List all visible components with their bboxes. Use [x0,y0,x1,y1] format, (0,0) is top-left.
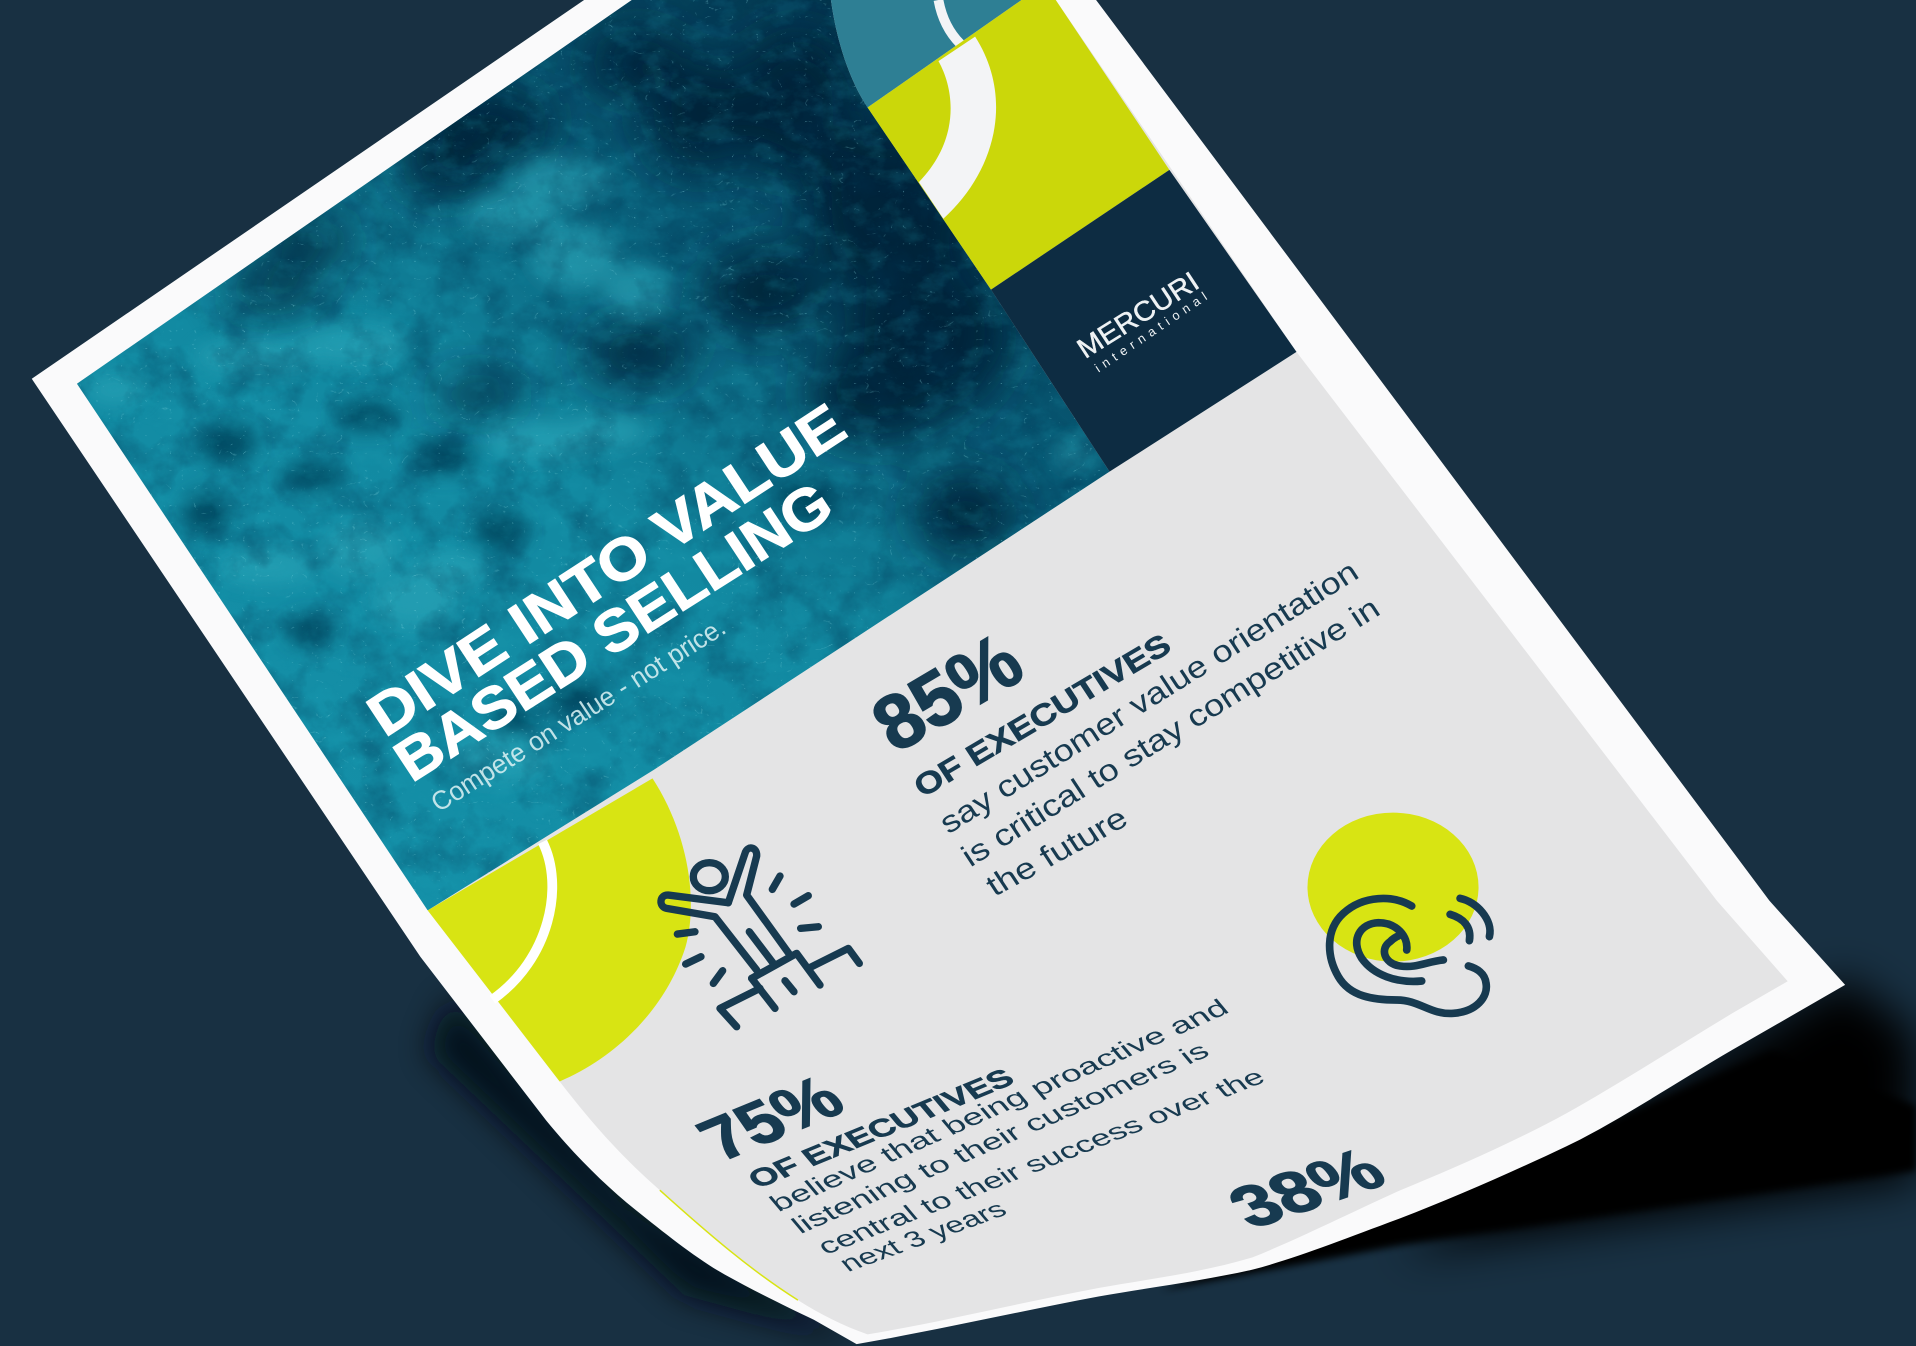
shadow under lower-left edge [428,996,855,1342]
logo: Mercuri International: MERCURI [1071,266,1204,364]
stat: 75% of executives: believe that being proactive and [764,995,1235,1217]
icon: person celebrating on podium [661,848,859,1027]
stat: 75% of executives: OF EXECUTIVES [742,1063,1020,1194]
panel: lime block with white arc [868,0,1169,290]
stat: 75% of executives [684,995,1271,1277]
stat: 75% of executives: next 3 years [834,1197,1013,1277]
shadow under curled corner [1161,978,1916,1290]
lower lime circle segment [428,778,691,1081]
title: DIVE INTO VALUE [356,392,857,749]
stat: 38%: 38% [1214,1136,1399,1240]
panel: navy logo block [991,170,1296,472]
panel: teal quarter circle [831,0,1022,108]
stat: 75% of executives: central to their success over the [812,1064,1271,1260]
stat: 85% of executives: say customer value orientation [933,554,1364,840]
stat: 85% of executives: OF EXECUTIVES [908,628,1177,804]
stat: 85% of executives: is critical to stay competitive in [955,591,1386,873]
stat: 85% of executives: the future [980,801,1134,903]
stat: 75% of executives: listening to their customers is [786,1038,1215,1239]
stat: 85% of executives: 85% [857,616,1038,768]
stat: 85% of executives [857,554,1386,903]
icon: ear [1330,898,1490,1013]
subtitle: Compete on value - not price. [425,612,731,818]
stat: 75% of executives: 75% [684,1063,857,1173]
ear circle [1307,813,1479,962]
title: BASED SELLING [383,470,844,794]
panel: marble water image [49,0,1149,929]
logo: Mercuri International: international [1092,289,1210,375]
